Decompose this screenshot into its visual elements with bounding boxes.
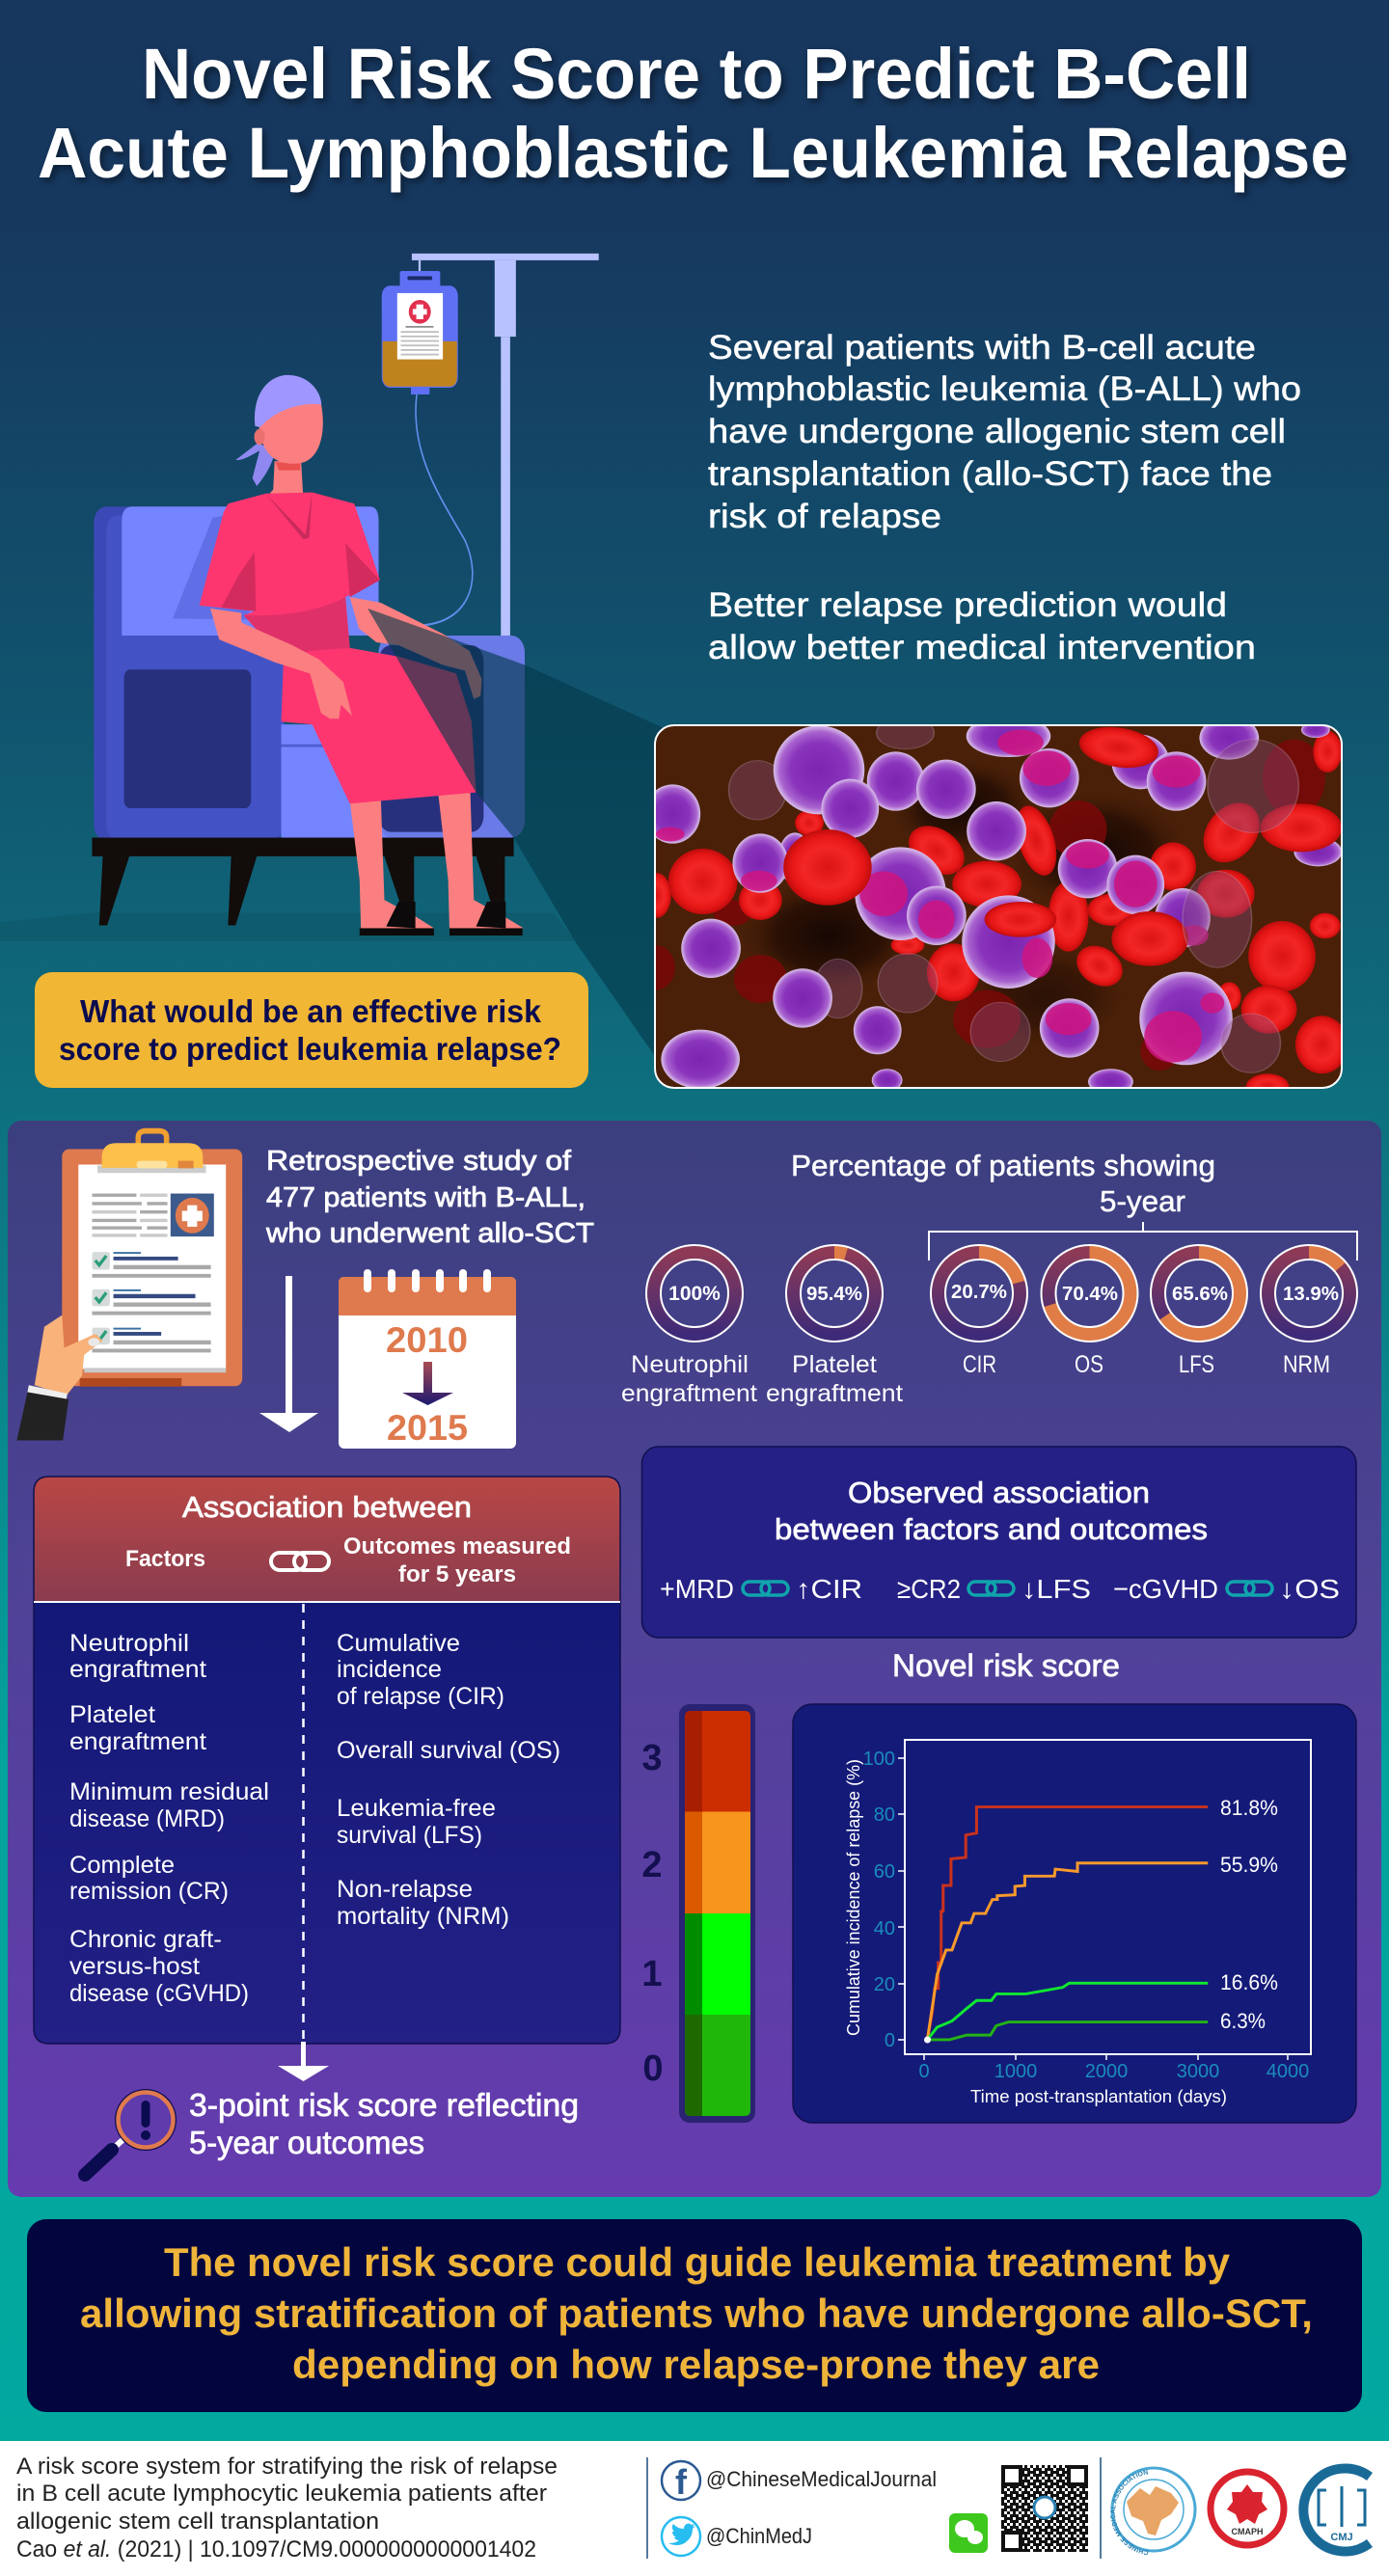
- study description: who underwent allo-SCT: [265, 1218, 594, 1249]
- chair: [92, 506, 525, 925]
- donut: CIR 20.7%: [931, 1245, 1027, 1342]
- dress: [200, 493, 477, 803]
- donut: LFS 65.6%: 65.6%: [1172, 1284, 1228, 1305]
- donut labels: engraftment: [766, 1380, 903, 1407]
- outcomes list: Overall survival (OS): [337, 1737, 560, 1764]
- panel: association between factors and outcomes: [34, 1477, 620, 2044]
- outcomes heading: [343, 1533, 571, 1587]
- callout: question: score to predict leukemia relapse?: [59, 1031, 561, 1067]
- factors list: Chronic graft-: [69, 1926, 222, 1953]
- axis ticks: [898, 1758, 1288, 2060]
- x axis labels: 2000: [1085, 2061, 1128, 2082]
- logo: CMJ: [1303, 2469, 1370, 2551]
- arrow: down to risk score: [278, 2042, 329, 2081]
- x axis labels: 4000: [1266, 2061, 1309, 2082]
- scarf tails: [235, 441, 275, 486]
- neck: [265, 461, 313, 498]
- heading: between factors and outcomes: [775, 1512, 1208, 1546]
- outcomes heading: Outcomes measured: [343, 1533, 571, 1559]
- association row: ↓OS: [1279, 1574, 1340, 1604]
- study description: [265, 1146, 594, 1249]
- risk score statement: 5-year outcomes: [189, 2125, 424, 2160]
- icon: calendar 2010 to 2015: 2015: [387, 1408, 468, 1448]
- x axis title: Time post-transplantation (days): [970, 2087, 1227, 2106]
- association row: +MRD: [660, 1574, 734, 1604]
- curve value labels: [1220, 1796, 1278, 2033]
- outcomes list: Non-relapse: [337, 1876, 473, 1903]
- face: [259, 403, 323, 464]
- pink cell nuclei: [656, 730, 1224, 1063]
- ghost cells: [729, 717, 1030, 1062]
- y axis labels: 60: [874, 1861, 895, 1883]
- arm far: [350, 597, 482, 699]
- association row: ↑CIR: [796, 1574, 862, 1604]
- study description: Retrospective study of: [266, 1146, 572, 1177]
- twitter handle: @ChinMedJ: [706, 2524, 812, 2548]
- association row: ↓LFS: [1021, 1574, 1091, 1604]
- panel: conclusion: allowing stratification of patients who have undergone allo-SCT,: [80, 2291, 1313, 2336]
- panel: study: [8, 1121, 1381, 2197]
- icon: calendar 2010 to 2015: 2010: [386, 1320, 468, 1360]
- donut: NRM 13.9%: 13.9%: [1283, 1284, 1339, 1305]
- risk score bar: [679, 1704, 755, 2123]
- outcomes list: mortality (NRM): [337, 1903, 509, 1930]
- icon: link: [271, 1553, 329, 1570]
- donut: OS 70.4%: 70.4%: [1062, 1284, 1118, 1305]
- donut labels: LFS: [1179, 1351, 1214, 1378]
- factors list: engraftment: [69, 1656, 206, 1683]
- chart: cumulative incidence of relapse: [793, 1704, 1356, 2123]
- logo: Chinese Medical Association: [1110, 2467, 1196, 2556]
- logo: CMAPH: [1211, 2472, 1284, 2545]
- panel: conclusion: [27, 2219, 1362, 2412]
- legs: [350, 793, 524, 930]
- y axis labels: 0: [885, 2030, 895, 2051]
- donut labels: Neutrophil: [631, 1351, 749, 1378]
- factors list: remission (CR): [69, 1878, 229, 1905]
- outcomes list: survival (LFS): [337, 1822, 482, 1849]
- factors list: Neutrophil: [69, 1630, 189, 1657]
- donut: CIR 20.7%: 20.7%: [951, 1282, 1007, 1303]
- factors list: Complete: [69, 1852, 175, 1879]
- x axis labels: 0: [918, 2061, 930, 2082]
- ear: [255, 429, 265, 445]
- micrograph: blood cells: [637, 716, 1348, 1099]
- outcomes heading: for 5 years: [398, 1561, 516, 1587]
- factors list: Platelet: [69, 1701, 155, 1728]
- donut labels: OS: [1075, 1351, 1103, 1378]
- association row: −cGVHD: [1113, 1574, 1218, 1604]
- footer background: [0, 2441, 1389, 2576]
- red cells front: [783, 720, 1342, 966]
- micrograph border: [655, 725, 1342, 1088]
- heading: Observed association: [848, 1476, 1150, 1509]
- curve value labels: 55.9%: [1220, 1853, 1278, 1877]
- citation: A risk score system for stratifying the risk of relapse: [16, 2454, 558, 2480]
- factors list: engraftment: [69, 1728, 206, 1755]
- title: Acute Lymphoblastic Leukemia Relapse: [38, 113, 1348, 193]
- patient: [200, 375, 524, 935]
- icon: calendar 2010 to 2015: [339, 1269, 516, 1449]
- x axis labels: 1000: [994, 2061, 1037, 2082]
- icon: teal links: [743, 1582, 1272, 1595]
- floor band: [0, 913, 576, 941]
- bracket: 5-year outcomes: [929, 1222, 1357, 1261]
- icon: facebook: f: [675, 2462, 688, 2502]
- factors list: versus-host: [69, 1953, 200, 1980]
- panel: conclusion: The novel risk score could guide leukemia treatment by: [164, 2239, 1231, 2285]
- donut: platelet engraftment 95.4%: [786, 1245, 883, 1342]
- factors heading: Factors: [125, 1546, 205, 1572]
- heading: percentage of patients: 5-year: [1100, 1184, 1185, 1218]
- donut labels: [621, 1351, 1330, 1407]
- risk score statement: [189, 2087, 579, 2160]
- outcomes list: of relapse (CIR): [337, 1683, 504, 1710]
- y axis labels: [863, 1749, 895, 2051]
- facebook handle: @ChineseMedicalJournal: [706, 2467, 937, 2491]
- donut: OS 70.4%: [1042, 1245, 1138, 1342]
- logo: CMAPH: CMAPH: [1231, 2527, 1264, 2536]
- citation: in B cell acute lymphocytic leukemia patients after: [16, 2481, 547, 2507]
- red cells back: [642, 731, 1348, 1099]
- icon: IV tube: [416, 394, 473, 625]
- outcomes list: Leukemia-free: [337, 1795, 496, 1822]
- curve value labels: 16.6%: [1220, 1970, 1278, 1994]
- intro text: have undergone allogenic stem cell: [708, 413, 1286, 450]
- donut labels: Platelet: [792, 1351, 877, 1378]
- icon: facebook: [662, 2461, 700, 2502]
- risk score numbers: 3: [641, 1738, 663, 1778]
- illustration: patient on chair with IV drip: [0, 254, 665, 1070]
- risk score numbers: 2: [641, 1845, 663, 1885]
- icon: IV bag: [382, 260, 458, 394]
- donut labels: CIR: [963, 1351, 996, 1378]
- intro text: Better relapse prediction would: [708, 586, 1227, 624]
- intro text: transplantation (allo-SCT) face the: [708, 455, 1272, 493]
- factors list: disease (MRD): [69, 1805, 225, 1832]
- donut: neutrophil engraftment 100%: 100%: [668, 1283, 721, 1305]
- y axis labels: 80: [874, 1804, 895, 1826]
- title: [38, 34, 1348, 193]
- intro text: [708, 329, 1301, 666]
- sandals: [360, 902, 523, 935]
- headscarf: [255, 375, 321, 427]
- intro text: lymphoblastic leukemia (B-ALL) who: [708, 370, 1301, 408]
- dark red out-of-focus cells: [637, 740, 1325, 1071]
- intro text: Several patients with B-cell acute: [708, 329, 1256, 366]
- leukemic cells: [644, 716, 1342, 1095]
- curve value labels: 81.8%: [1220, 1796, 1278, 1820]
- x axis labels: 3000: [1177, 2061, 1219, 2082]
- risk score numbers: [641, 1738, 664, 2089]
- risk score statement: 3-point risk score reflecting: [189, 2087, 579, 2123]
- x axis labels: [918, 2061, 1309, 2082]
- risk score numbers: 0: [642, 2048, 664, 2089]
- intro text: allow better medical intervention: [708, 629, 1256, 666]
- arrow: down to calendar: [259, 1276, 318, 1432]
- title: Novel Risk Score to Predict B-Cell: [142, 34, 1251, 114]
- donut: platelet engraftment 95.4%: 95.4%: [806, 1284, 862, 1305]
- risk score numbers: 1: [641, 1954, 663, 1994]
- callout: question: What would be an effective risk: [80, 993, 542, 1029]
- citation: [16, 2454, 558, 2562]
- panel: observed association: [642, 1447, 1356, 1638]
- heading: percentage of patients: [791, 1149, 1215, 1218]
- donut: LFS 65.6%: [1151, 1245, 1247, 1342]
- panel: conclusion: depending on how relapse-prone they are: [292, 2342, 1100, 2387]
- intro text: risk of relapse: [708, 498, 941, 535]
- study description: 477 patients with B-ALL,: [266, 1182, 586, 1213]
- donut: neutrophil engraftment 100%: [646, 1245, 743, 1342]
- association row: ≥CR2: [897, 1574, 961, 1604]
- y axis labels: 40: [874, 1918, 895, 1939]
- heading: [775, 1476, 1208, 1546]
- curve value labels: 6.3%: [1220, 2009, 1266, 2033]
- factors list: [69, 1630, 269, 2007]
- light beam: [368, 609, 665, 1070]
- callout: question: [35, 972, 588, 1088]
- logo: CMJ: CMJ: [1330, 2532, 1353, 2543]
- footer dividers: [647, 2457, 1101, 2559]
- factors list: disease (cGVHD): [69, 1980, 249, 2007]
- icon: IV stand: [412, 254, 599, 642]
- outcomes list: incidence: [337, 1656, 442, 1683]
- outcomes list: [337, 1630, 560, 1930]
- y axis labels: 20: [874, 1974, 895, 1995]
- heading: novel risk score: Novel risk score: [892, 1648, 1120, 1683]
- icon: clipboard with hand: [16, 1131, 242, 1440]
- arm near: [210, 609, 352, 719]
- donut: NRM 13.9%: [1261, 1245, 1357, 1342]
- citation: allogenic stem cell transplantation: [16, 2508, 379, 2535]
- donut labels: NRM: [1283, 1351, 1330, 1378]
- citation: Cao et al. (2021) | 10.1097/CM9.0000000000001402: [16, 2536, 536, 2562]
- logo: Chinese Medical Association: CHINESE MEDICAL ASSOCIATION: [1110, 2469, 1148, 2556]
- QR code: [1001, 2465, 1088, 2552]
- y axis title: Cumulative incidence of relapse (%): [844, 1759, 863, 2036]
- outcomes list: Cumulative: [337, 1630, 460, 1657]
- y axis labels: 100: [863, 1749, 895, 1770]
- association row: [660, 1574, 1340, 1604]
- donut labels: engraftment: [621, 1380, 757, 1407]
- heading: percentage of patients: Percentage of patients showing: [791, 1149, 1215, 1182]
- icon: wechat: [949, 2513, 988, 2553]
- icon: twitter: [662, 2517, 700, 2556]
- ghost cells front: [878, 740, 1298, 1072]
- curves: [927, 1807, 1208, 2040]
- factors list: Minimum residual: [69, 1778, 269, 1805]
- heading: Association between: [182, 1490, 472, 1524]
- icon: magnifier: [85, 2089, 177, 2175]
